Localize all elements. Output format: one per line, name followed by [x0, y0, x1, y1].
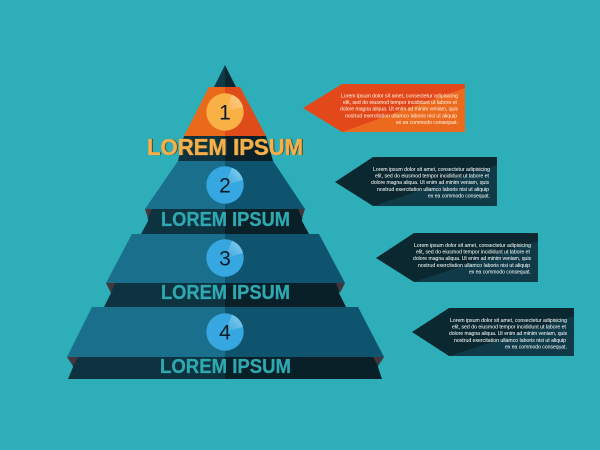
callout 4: Lorem ipsum dolor sit amet, consectetur adipisicing [450, 318, 567, 324]
callout 3 [376, 233, 538, 282]
tier 1 dark band [178, 136, 273, 161]
callout 1 [303, 84, 465, 132]
tier 2 fold marks [145, 209, 305, 218]
callout 1: dolore magna aliqua. Ut enim ad minim veniam, quis [340, 107, 458, 113]
tier 4 blue block [67, 307, 384, 357]
badge 2: 2 [219, 174, 231, 198]
heading 2: LOREM IPSUM [161, 209, 290, 231]
callout 3: elit, sed do eiusmod tempor incididunt ut labore et [416, 250, 530, 256]
callout 1: ex ea commodo consequat. [396, 120, 458, 126]
callout 2 [335, 157, 497, 206]
pyramid [67, 65, 384, 379]
callout 4: dolore magna aliqua. Ut enim ad minim veniam, quis [449, 331, 567, 337]
heading 4: LOREM IPSUM [160, 356, 291, 378]
callout 2: Lorem ipsum dolor sit amet, consectetur adipisicing [373, 167, 490, 173]
callout 4: nostrud exercitation ullamco laboris nisi ut aliquip [454, 338, 566, 344]
tier 2 blue block [145, 161, 305, 209]
badge 4: 4 [219, 322, 231, 344]
callout 2: dolore magna aliqua. Ut enim ad minim veniam, quis [371, 180, 489, 186]
badge 3: 3 [219, 248, 231, 270]
apex triangle [214, 65, 236, 87]
tier 3 blue block [106, 234, 345, 283]
tier 4 fold marks [67, 357, 384, 366]
heading 3: LOREM IPSUM [161, 282, 290, 304]
heading 1: LOREM IPSUM [148, 134, 304, 160]
badge 3 [206, 239, 244, 277]
badge 1: 1 [219, 102, 231, 124]
callout 2: ex ea commodo consequat. [428, 193, 490, 199]
tier 2 dark band [141, 209, 309, 234]
badge 1 [206, 93, 244, 131]
badge 2 [206, 166, 244, 204]
callout 3: nostrud exercitation ullamco laboris nisi ut aliquip [418, 263, 530, 269]
callout 1: elit, sed do eiusmod tempor incididunt ut labore et [343, 100, 457, 106]
callout 3: ex ea commodo consequat. [469, 269, 531, 275]
badge 4 [206, 313, 244, 351]
callout 3: Lorem ipsum dolor sit amet, consectetur adipisicing [414, 243, 531, 249]
callout 2: nostrud exercitation ullamco laboris nisi ut aliquip [377, 187, 489, 193]
tier 3 dark band [104, 283, 346, 307]
callout 1: Lorem ipsum dolor sit amet, consectetur adipisicing [341, 94, 458, 100]
tier 3 fold marks [106, 283, 345, 293]
heading 1: LOREM IPSUM [147, 134, 303, 160]
callout 3: dolore magna aliqua. Ut enim ad minim veniam, quis [413, 256, 531, 262]
callout 4 [412, 308, 574, 356]
callout 2: elit, sed do eiusmod tempor incididunt ut labore et [375, 174, 489, 180]
callout 4: ex ea commodo consequat. [505, 344, 567, 350]
tier 1 orange block [184, 87, 266, 136]
callout 1: nostrud exercitation ullamco laboris nisi ut aliquip [345, 113, 457, 119]
tier 4 dark band [68, 357, 382, 379]
callout 4: elit, sed do eiusmod tempor incididunt ut labore et [452, 325, 566, 331]
